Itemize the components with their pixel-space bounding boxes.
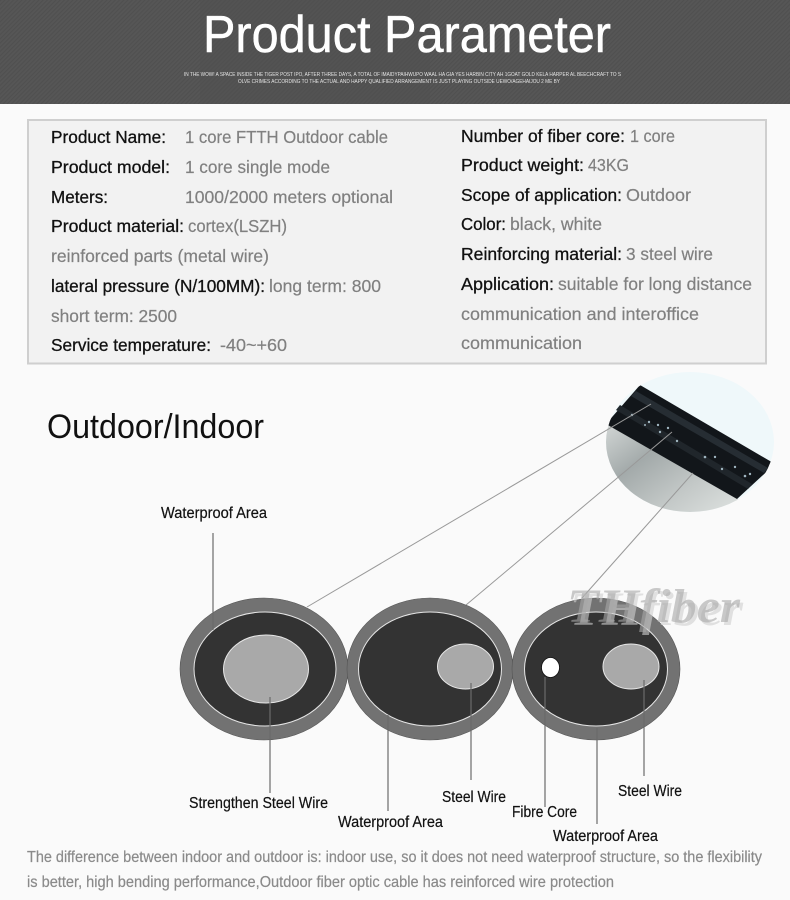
- watermark: THfiber: [567, 580, 741, 633]
- right parameter column: 1 core: [630, 126, 675, 146]
- right parameter column: Application:: [461, 274, 554, 294]
- photo: cable close-up lens: [606, 372, 774, 512]
- right parameter column: 3 steel wire: [626, 244, 713, 264]
- left parameter column: 1 core FTTH Outdoor cable: [185, 127, 388, 147]
- right parameter column: Outdoor: [626, 185, 691, 205]
- left parameter column: Product Name:: [51, 127, 166, 147]
- left parameter column: reinforced parts (metal wire): [51, 246, 269, 266]
- left parameter column: 1 core single mode: [185, 157, 330, 177]
- right parameter column: suitable for long distance: [558, 274, 752, 294]
- callout lines: [213, 533, 644, 824]
- right parameter column: 43KG: [588, 155, 629, 175]
- right parameter column: Reinforcing material:: [461, 244, 622, 264]
- cross-section: strengthened cable: [180, 598, 348, 740]
- left parameter column: 1000/2000 meters optional: [185, 187, 393, 207]
- left parameter column: long term: 800: [269, 276, 381, 296]
- cross-section: fibre core cable: [512, 598, 680, 740]
- callout labels: [161, 505, 682, 845]
- header small print: [184, 72, 621, 85]
- callout labels: Waterproof Area: [161, 505, 267, 522]
- left parameter column: Meters:: [51, 187, 108, 207]
- header small print: IN THE WOW! A SPACE INSIDE THE TIGER POST IPO, AFTER THREE DAYS, A TOTAL OF IMAIDYPAIHWUPO WAAL HA GIA YES HARBIN CITY AH 1GOAT GOLD KELA HARPER AL BEECHCRAFT TO S: [184, 72, 621, 78]
- left parameter column: cortex(LSZH): [188, 216, 287, 236]
- right parameter column: Scope of application:: [461, 185, 622, 205]
- callout labels: Fibre Core: [512, 804, 577, 821]
- right parameter column: black, white: [510, 214, 602, 234]
- bottom description: [27, 849, 762, 891]
- callout labels: Waterproof Area: [553, 828, 658, 845]
- heading: Outdoor/Indoor: Outdoor/Indoor: [47, 408, 264, 446]
- right parameter column: communication and interoffice: [461, 304, 699, 324]
- title: Product Parameter: [203, 6, 611, 64]
- callout labels: Waterproof Area: [338, 814, 443, 831]
- header banner: [0, 0, 790, 104]
- left parameter column: -40~+60: [220, 335, 287, 355]
- left parameter column: [51, 127, 393, 355]
- callout labels: Strengthen Steel Wire: [189, 795, 328, 812]
- panel: product parameters: [28, 120, 766, 364]
- watermark: THfiber: [570, 583, 744, 636]
- right parameter column: Number of fiber core:: [461, 126, 625, 146]
- bottom description: is better, high bending performance,Outdoor fiber optic cable has reinforced wire protection: [27, 874, 614, 891]
- left parameter column: lateral pressure (N/100MM):: [51, 276, 265, 296]
- leader lines to photo: [307, 404, 693, 607]
- header small print: OLVE CRIMES ACCORDING TO THE ACTUAL AND HAPPY QUALIFIED ARRANGEMENT IS JUST PLAYING OUTSIDE UEWO/AGEHAIJOU 2 ME BY: [238, 79, 560, 85]
- diagram: cable cross-sections: [180, 598, 680, 740]
- left parameter column: Product material:: [51, 216, 184, 236]
- right parameter column: communication: [461, 333, 582, 353]
- left parameter column: short term: 2500: [51, 306, 177, 326]
- left parameter column: Service temperature:: [51, 335, 211, 355]
- left parameter column: Product model:: [51, 157, 170, 177]
- cross-section: single steel wire cable: [347, 598, 513, 740]
- callout labels: Steel Wire: [442, 789, 506, 806]
- callout labels: Steel Wire: [618, 783, 682, 800]
- right parameter column: [461, 126, 752, 353]
- right parameter column: Color:: [461, 214, 506, 234]
- right parameter column: Product weight:: [461, 155, 584, 175]
